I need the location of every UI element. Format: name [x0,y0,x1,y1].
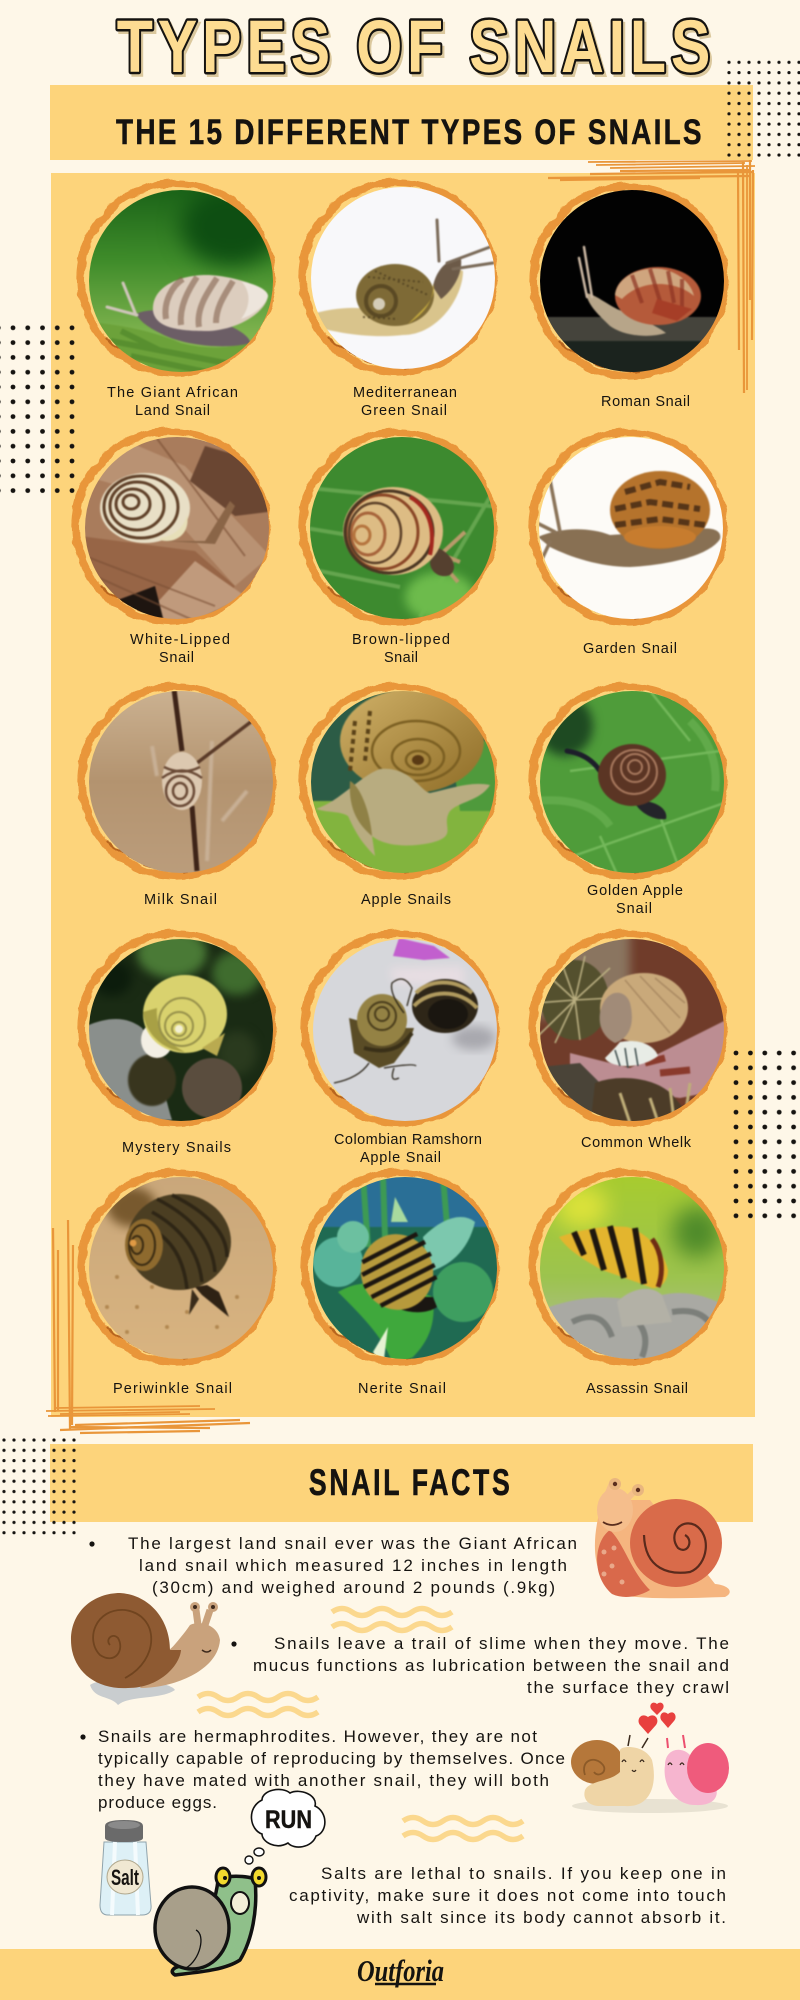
thought bubble: run [245,1789,325,1864]
caption: mediterranean: Mediterranean [353,385,457,401]
photo: nerite snail [301,1167,503,1367]
icon: salt shaker: Salt [111,1865,139,1890]
icon: orange snail [595,1478,730,1598]
icon: salt shaker [100,1820,151,1915]
photo: mediterranean green snail [299,177,503,377]
thought bubble: run: RUN [265,1806,312,1834]
caption: apple snail: Apple Snail [360,1150,441,1166]
photo: apple snail [299,681,500,881]
caption: snail: Snail [159,650,194,666]
footer band [0,1949,800,2000]
photo: mystery snail [77,928,277,1128]
title: TYPES OF SNAILS [119,9,713,92]
caption: snail: Snail [384,650,418,666]
wave: middle [198,1694,318,1716]
fact 2: Snails leave a trail of slime when they move. The [274,1634,729,1653]
caption: green snail: Green Snail [361,403,447,419]
caption: common whelk: Common Whelk [581,1135,692,1151]
decorative dots: right [732,1050,800,1220]
caption: golden apple: Golden Apple [587,883,683,899]
fact 1: land snail which measured 12 inches in length [139,1556,567,1575]
panel: snail types [51,173,755,1417]
photo: golden apple snail [529,681,730,881]
photo: white-lipped snail [72,426,275,626]
facts banner [50,1444,753,1522]
fact 2: the surface they crawl [527,1678,729,1697]
caption: assassin snail: Assassin Snail [586,1381,688,1397]
icon: brown snail [71,1593,220,1705]
photo: colombian ramshorn apple snail [301,928,504,1128]
sketch frame: top right [548,160,755,393]
caption: milk snail: Milk Snail [144,892,217,908]
photo: assassin snail [529,1167,732,1367]
fact 3 [80,1727,565,1812]
decorative dots: lower left [0,1437,78,1536]
caption: roman snail: Roman Snail [601,394,690,410]
caption: land snail: Land Snail [135,403,210,419]
caption: garden snail: Garden Snail [583,641,677,657]
fact 2: mucus functions as lubrication between the snail and [253,1656,729,1675]
caption: apple snails: Apple Snails [361,892,451,908]
caption: white-lipped: White-Lipped [130,632,230,648]
fact 4 [289,1864,726,1927]
decorative dots: top right [725,59,800,158]
logo: outforia: Outforia [357,1953,444,1988]
fact 1 [89,1534,577,1597]
photo: giant african land snail [77,180,281,381]
photo: roman snail [530,181,732,381]
photo: garden snail [529,427,730,627]
caption: brown-lipped: Brown-lipped [352,632,450,648]
fact 1: The largest land snail ever was the Giant African [128,1534,577,1553]
wave: upper [332,1608,452,1630]
photo: periwinkle snail [77,1167,277,1367]
photo: milk snail [77,681,277,881]
fact 3: they have mated with another snail, they will both [98,1771,549,1790]
fact 1: (30cm) and weighed around 2 pounds (.9kg) [152,1578,555,1597]
fact 4: Salts are lethal to snails. If you keep one in [321,1864,726,1883]
caption: mystery snails: Mystery Snails [122,1140,231,1156]
fact 2 [231,1634,729,1697]
caption: nerite snail: Nerite Snail [358,1381,446,1397]
decorative dots: left [0,324,76,495]
subtitle banner [50,85,753,160]
fact 3: typically capable of reproducing by themselves. Once [98,1749,565,1768]
fact 3: Snails are hermaphrodites. However, they are not [98,1727,537,1746]
icon: scared green snail [155,1868,266,1975]
fact 3: produce eggs. [98,1793,217,1812]
sketch frame: bottom left [46,1220,250,1433]
caption: snail: Snail [616,901,652,917]
fact 4: with salt since its body cannot absorb it. [356,1908,726,1927]
facts banner: SNAIL FACTS [309,1462,510,1503]
fact 4: captivity, make sure it does not come into touch [289,1886,726,1905]
caption: giant african: The Giant African [107,385,238,401]
title: TYPES OF SNAILS [117,6,710,89]
photo: common whelk [529,928,730,1128]
wave: lower [403,1818,523,1840]
photo: brown-lipped snail [299,427,500,627]
icon: snail couple with hearts [571,1703,729,1813]
caption: colombian ramshorn: Colombian Ramshorn [334,1132,482,1148]
subtitle banner: THE 15 DIFFERENT TYPES OF SNAILS [116,112,702,152]
caption: periwinkle snail: Periwinkle Snail [113,1381,232,1397]
